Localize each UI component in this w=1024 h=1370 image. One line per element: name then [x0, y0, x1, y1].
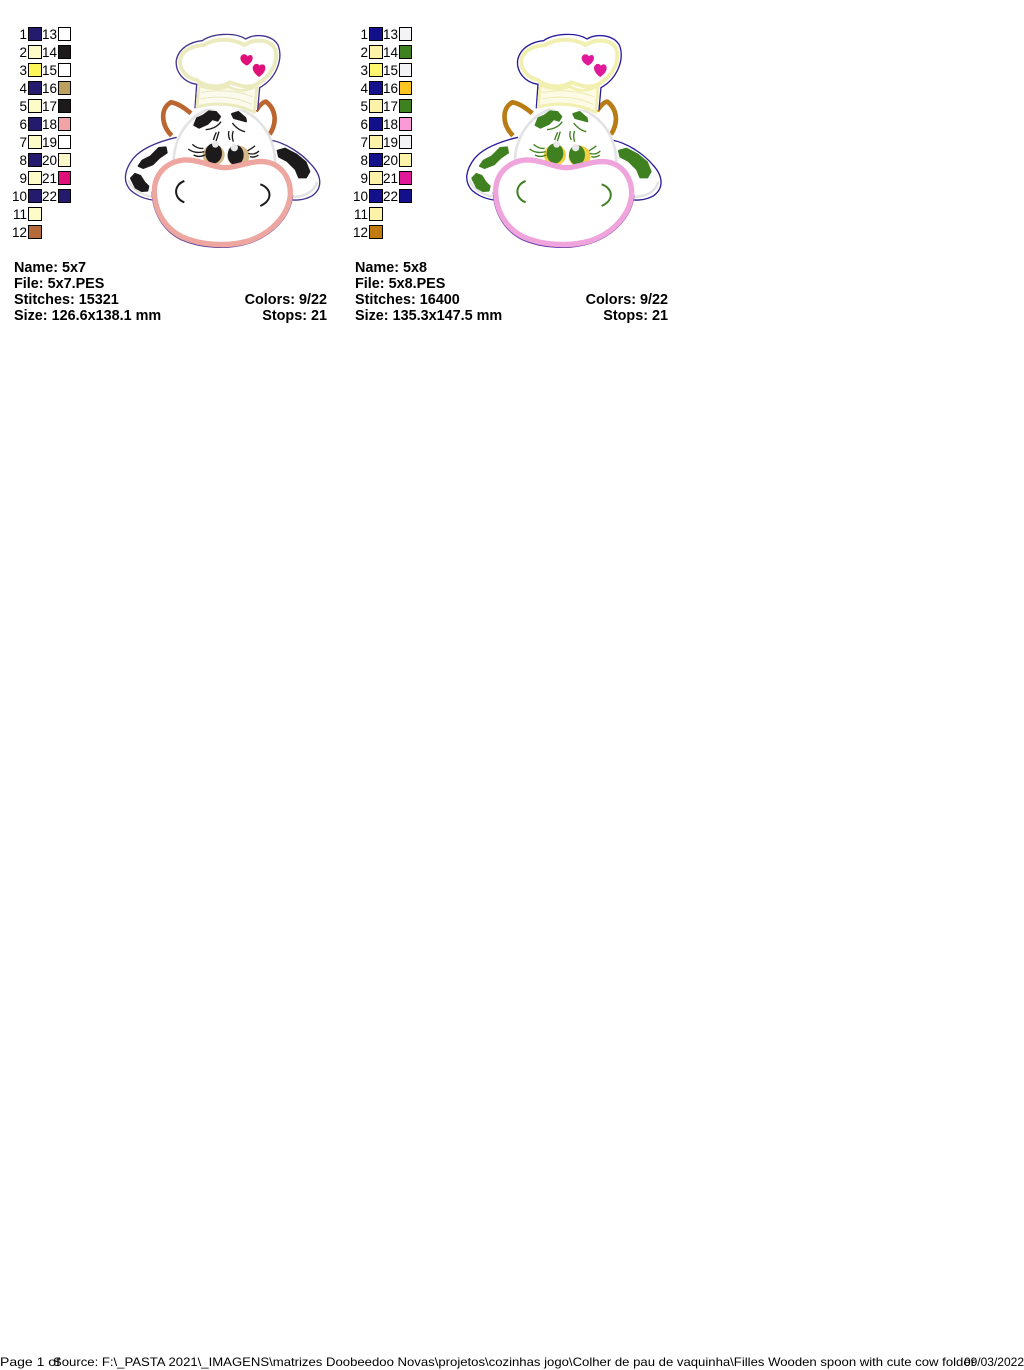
- color legend: 5x7: 22: [42, 189, 57, 204]
- color legend: 5x7: 17: [42, 99, 57, 114]
- color legend: 5x7: 13: [42, 27, 57, 42]
- muzzle: [496, 160, 632, 245]
- chef hat: [176, 34, 280, 112]
- design stats: 5x8: Size: 135.3x147.5 mm: [355, 308, 502, 324]
- color legend: 5x7: 14: [42, 45, 57, 60]
- color legend: 5x8: 18: [383, 117, 398, 132]
- right ear: [270, 140, 320, 200]
- color legend: 5x8: 4: [360, 81, 368, 96]
- head: [174, 107, 275, 217]
- footer: 09/03/2022: [964, 1355, 1024, 1369]
- head: [515, 107, 616, 217]
- panel: design 5x8: [353, 27, 668, 324]
- color legend: 5x7: 20: [42, 153, 57, 168]
- design stats: 5x8: Colors: 9/22: [586, 292, 668, 308]
- muzzle: [154, 160, 290, 245]
- design stats: 5x7: Size: 126.6x138.1 mm: [14, 308, 161, 324]
- color legend: 5x7: 12: [12, 225, 27, 240]
- color legend: 5x8: 12: [353, 225, 368, 240]
- design stats: 5x7: Stitches: 15321: [14, 292, 119, 308]
- illustration: chef cow, black spots: [125, 34, 320, 245]
- color legend: 5x7: 16: [42, 81, 57, 96]
- color legend: 5x7: 4: [19, 81, 27, 96]
- color legend: 5x8: 22: [383, 189, 398, 204]
- color legend: 5x7: [12, 27, 70, 240]
- color legend: 5x8: 14: [383, 45, 398, 60]
- left horn: [163, 102, 191, 136]
- footer: Source: F:\_PASTA 2021\_IMAGENS\matrizes Doobeedoo Novas\projetos\cozinhas jogo\Colher de pau de vaquinha\Filles Wooden spoon with cute cow folder: [53, 1355, 975, 1369]
- color legend: 5x8: 21: [383, 171, 398, 186]
- color legend: 5x8: 2: [360, 45, 368, 60]
- color legend: 5x7: 11: [13, 207, 27, 222]
- color legend: 5x8: 15: [383, 63, 398, 78]
- right ear: [611, 140, 661, 200]
- color legend: 5x7: 15: [42, 63, 57, 78]
- color legend: 5x7: 9: [19, 171, 27, 186]
- color legend: 5x7: 21: [42, 171, 57, 186]
- color legend: 5x8: 10: [353, 189, 368, 204]
- eyes: [188, 131, 259, 167]
- design stats: 5x8: Stops: 21: [603, 308, 668, 324]
- color legend: 5x7: 5: [19, 99, 27, 114]
- color legend: 5x7: 1: [19, 27, 27, 42]
- color legend: 5x8: 3: [360, 63, 368, 78]
- panel: design 5x7: [12, 27, 327, 324]
- color legend: 5x8: 9: [360, 171, 368, 186]
- design stats: 5x8: [355, 260, 668, 324]
- color legend: 5x8: 7: [360, 135, 368, 150]
- color legend: 5x8: 8: [360, 153, 368, 168]
- spots: [131, 111, 309, 191]
- design stats: 5x8: File: 5x8.PES: [355, 276, 446, 292]
- left ear: [125, 137, 177, 201]
- brow lines: [547, 122, 586, 132]
- design stats: 5x7: File: 5x7.PES: [14, 276, 105, 292]
- color legend: 5x7: 7: [19, 135, 27, 150]
- color legend: 5x8: 20: [383, 153, 398, 168]
- color legend: 5x8: 17: [383, 99, 398, 114]
- color legend: 5x8: 5: [360, 99, 368, 114]
- color legend: 5x7: 3: [19, 63, 27, 78]
- design stats: 5x7: [14, 260, 327, 324]
- color legend: 5x8: 19: [383, 135, 398, 150]
- color legend: 5x8: 6: [360, 117, 368, 132]
- color legend: 5x7: 8: [19, 153, 27, 168]
- color legend: 5x7: 18: [42, 117, 57, 132]
- color legend: 5x7: 10: [12, 189, 27, 204]
- color legend: 5x8: [353, 27, 412, 240]
- right horn: [256, 102, 275, 134]
- illustration: chef cow, green spots: [467, 34, 661, 245]
- left horn: [504, 102, 532, 136]
- footer: Page 1 of: [0, 1355, 61, 1369]
- chef hat: [517, 34, 621, 112]
- color legend: 5x8: 13: [383, 27, 398, 42]
- hearts: [582, 54, 594, 66]
- hearts: [240, 54, 253, 66]
- spots: [472, 111, 651, 191]
- design stats: 5x7: Stops: 21: [262, 308, 327, 324]
- color legend: 5x7: 19: [42, 135, 57, 150]
- eyes: [530, 131, 600, 167]
- color legend: 5x7: 6: [19, 117, 27, 132]
- color legend: 5x8: 1: [360, 27, 368, 42]
- brow lines: [206, 122, 245, 132]
- color legend: 5x8: 11: [354, 207, 368, 222]
- left ear: [467, 137, 518, 201]
- design stats: 5x7: Name: 5x7: [14, 260, 86, 276]
- design stats: 5x8: Name: 5x8: [355, 260, 427, 276]
- design stats: 5x7: Colors: 9/22: [245, 292, 327, 308]
- color legend: 5x7: 2: [19, 45, 27, 60]
- right horn: [597, 102, 616, 134]
- color legend: 5x8: 16: [383, 81, 398, 96]
- design stats: 5x8: Stitches: 16400: [355, 292, 460, 308]
